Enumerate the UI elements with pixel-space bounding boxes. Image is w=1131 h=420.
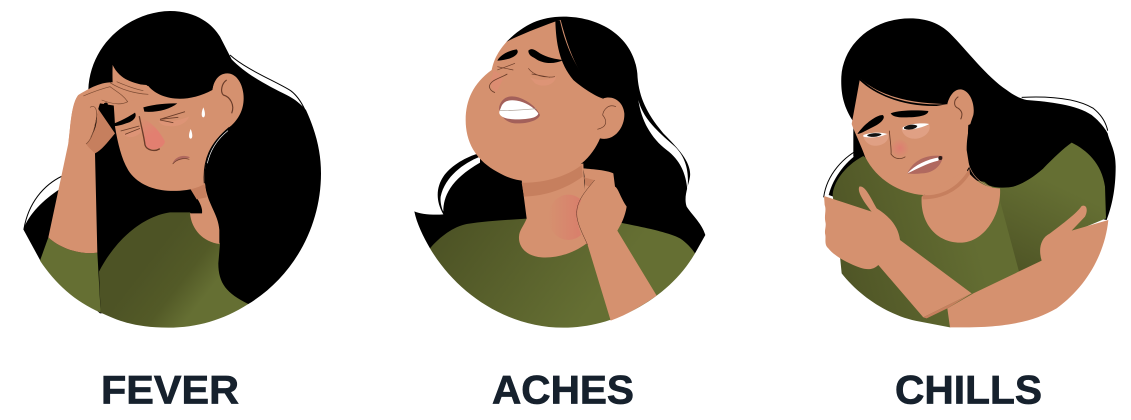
eyebrows — [104, 103, 177, 126]
crossing left arm and hand — [824, 187, 972, 317]
neck shadow — [522, 165, 583, 197]
crossing right arm — [947, 206, 1108, 327]
ear line — [597, 106, 616, 129]
hair — [414, 17, 705, 253]
nose — [890, 138, 909, 158]
shirt left shoulder and torso — [833, 156, 1063, 327]
neck shadow — [923, 168, 970, 199]
mouth — [907, 156, 943, 174]
outer hair lines — [824, 97, 1108, 197]
white hair highlights — [441, 100, 688, 212]
eye shadow — [123, 117, 189, 137]
torso — [99, 212, 248, 328]
fringe line — [859, 77, 948, 106]
left sleeve — [40, 237, 101, 313]
torso — [430, 219, 695, 328]
ear line — [222, 80, 233, 113]
outer hair lines — [24, 55, 305, 229]
mouth — [173, 156, 190, 163]
illustration: aches — [414, 17, 705, 328]
arm crease — [923, 293, 972, 318]
nose — [491, 70, 503, 92]
right shoulder — [997, 143, 1106, 272]
cheek hair line — [207, 131, 228, 163]
finger detail — [584, 177, 594, 187]
hair over neck — [968, 113, 1043, 188]
hair — [841, 18, 1116, 220]
fringe — [113, 33, 220, 99]
illustration: chills — [824, 18, 1116, 327]
face — [112, 65, 244, 191]
eye lines — [121, 112, 185, 134]
eyes — [863, 125, 930, 146]
hair strand — [555, 21, 604, 99]
label: aches: ACHES — [492, 368, 634, 412]
face and neck — [852, 78, 974, 195]
sore spot — [548, 195, 588, 240]
neck — [519, 163, 587, 257]
neck — [190, 183, 219, 244]
hair — [23, 11, 321, 313]
nose — [139, 117, 165, 149]
chest — [922, 170, 1000, 243]
eyebrows — [858, 110, 928, 134]
arm and hand — [577, 168, 657, 321]
illustration: fever — [23, 11, 321, 328]
mouth — [499, 96, 540, 123]
ear line — [955, 97, 962, 119]
hand — [86, 107, 115, 153]
eye lines — [497, 63, 555, 77]
tears — [189, 107, 205, 139]
eyebrows — [497, 49, 563, 63]
label: fever: FEVER — [101, 368, 239, 412]
hand lines — [83, 82, 148, 144]
forearm — [48, 95, 97, 253]
label: chills: CHILLS — [895, 368, 1042, 412]
black hair at shoulder — [829, 150, 867, 197]
face — [466, 20, 624, 181]
